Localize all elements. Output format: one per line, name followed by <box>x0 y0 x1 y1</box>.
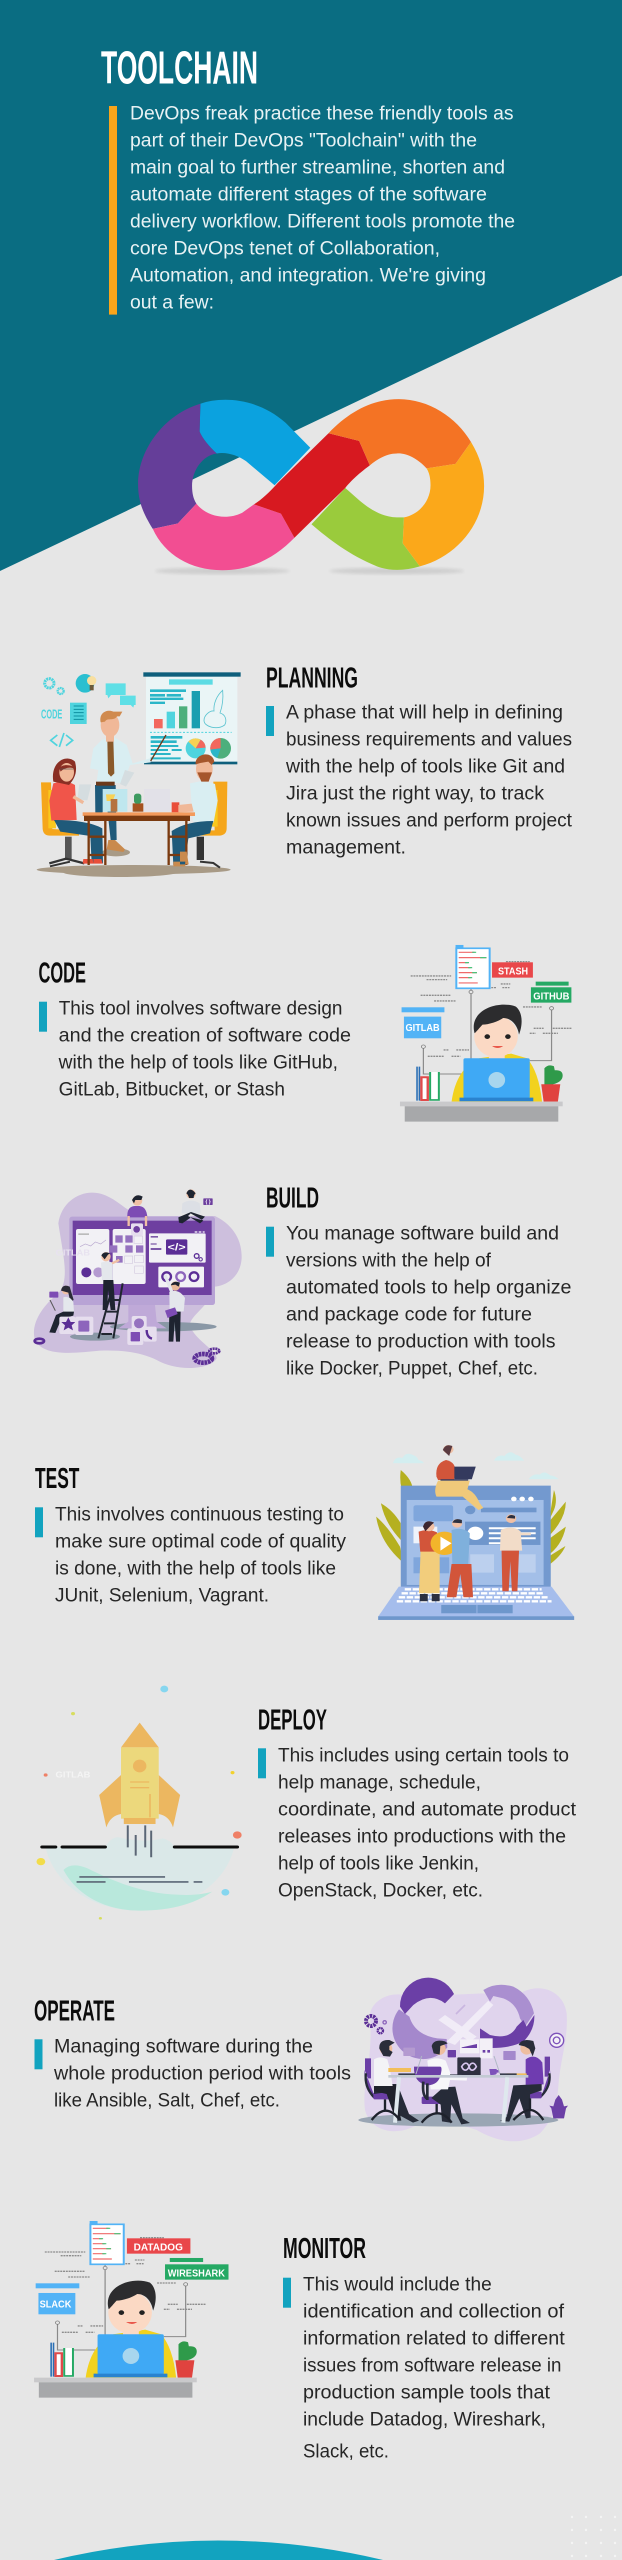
panel: hero background <box>0 0 622 571</box>
intro text: delivery workflow. Different tools promote the <box>130 212 515 233</box>
text: build <box>286 1223 572 1379</box>
text: operate: Managing software during the <box>54 2036 313 2057</box>
text: code <box>58 998 351 1100</box>
text: monitor: issues from software release in <box>303 2356 562 2377</box>
heading: monitor: MONITOR <box>283 2233 366 2265</box>
text: operate: like Ansible, Salt, Chef, etc. <box>54 2090 280 2111</box>
text: planning: with the help of tools like Git and <box>285 757 565 778</box>
illustration: developer at laptop with GitLab, GitHub and Stash tags: GITLAB <box>406 1023 440 1034</box>
text: deploy: help manage, schedule, <box>278 1772 481 1793</box>
panel: deploy <box>37 1686 577 1920</box>
panel: monitor <box>34 2221 565 2463</box>
illustration: team meeting at whiteboard: CODE <box>41 707 62 722</box>
text: planning <box>285 703 573 859</box>
panel: operate <box>34 1978 568 2141</box>
accent bar: code <box>39 1002 47 1032</box>
text: test: This involves continuous testing to <box>55 1504 344 1525</box>
text: deploy <box>278 1745 577 1901</box>
panel: code <box>38 945 572 1122</box>
panel: build <box>34 1182 571 1379</box>
text: deploy: help of tools like Jenkin, <box>278 1853 479 1874</box>
accent bar: monitor <box>283 2278 291 2308</box>
illustration: developer at laptop with GitLab, GitHub and Stash tags <box>400 945 572 1122</box>
text: code: This tool involves software design <box>59 998 342 1019</box>
footer arc <box>54 2540 383 2560</box>
heading: code: CODE <box>38 957 86 989</box>
panel: test <box>35 1445 574 1620</box>
illustration: developer at laptop with GitLab, GitHub and Stash tags: GITHUB <box>533 991 569 1002</box>
illustration: team testing on a laptop screen <box>376 1445 574 1620</box>
text: code: and the creation of software code <box>59 1026 351 1047</box>
illustration: developer at laptop with GitLab, GitHub and Stash tags: STASH <box>498 966 528 977</box>
text: build: release to production with tools <box>286 1331 556 1352</box>
heading: planning: PLANNING <box>266 662 358 694</box>
text: monitor: identification and collection of <box>303 2302 565 2323</box>
text: deploy: This includes using certain tools to <box>278 1745 569 1766</box>
intro text: main goal to further streamline, shorten and <box>130 157 505 178</box>
text: deploy: coordinate, and automate product <box>278 1799 577 1820</box>
text: deploy: releases into productions with the <box>278 1826 566 1847</box>
illustration: rocket launch <box>37 1686 242 1920</box>
illustration: team building on a large monitor <box>34 1189 242 1368</box>
text: deploy: OpenStack, Docker, etc. <box>278 1880 483 1901</box>
text: monitor <box>303 2275 565 2463</box>
text: test: make sure optimal code of quality <box>55 1531 346 1552</box>
title: TOOLCHAIN <box>101 41 258 93</box>
intro text: DevOps freak practice these friendly tools as <box>130 103 514 124</box>
accent bar: planning <box>266 706 274 736</box>
illustration: team meeting at whiteboard <box>37 672 241 877</box>
dot pattern <box>571 2516 616 2557</box>
intro text <box>130 103 515 314</box>
text: monitor: include Datadog, Wireshark, <box>303 2410 546 2431</box>
intro text: out a few: <box>130 292 214 314</box>
illustration: team around table under infinity symbol <box>358 1978 568 2141</box>
text: test <box>55 1504 346 1606</box>
illustration: team building on a large monitor: { } <box>205 1200 211 1206</box>
intro text: automate different stages of the software <box>130 184 487 206</box>
text: operate <box>53 2036 351 2111</box>
accent bar: operate <box>34 2039 42 2069</box>
text: monitor: Slack, etc. <box>303 2442 389 2463</box>
heading: deploy: DEPLOY <box>258 1704 327 1736</box>
text: monitor: information related to different <box>303 2329 565 2350</box>
heading: operate: OPERATE <box>34 1996 115 2028</box>
accent bar: intro <box>109 106 117 315</box>
icon: DevOps infinity loop <box>138 399 484 574</box>
text: build: versions with the help of <box>286 1250 492 1271</box>
text: planning: known issues and perform project <box>286 811 573 832</box>
illustration: developer at laptop with Slack, Datadog and Wireshark tags: DATADOG <box>134 2242 183 2253</box>
intro text: Automation, and integration. We're giving <box>130 266 486 287</box>
illustration: developer at laptop with Slack, Datadog and Wireshark tags <box>34 2221 229 2398</box>
text: build: You manage software build and <box>286 1223 559 1244</box>
heading: build: BUILD <box>266 1182 319 1214</box>
text: planning: management. <box>286 838 406 859</box>
text: planning: A phase that will help in defining <box>286 703 563 724</box>
text: planning: business requirements and values <box>286 730 572 751</box>
panel: planning <box>37 662 573 877</box>
accent bar: build <box>266 1227 274 1257</box>
text: operate: whole production period with tools <box>53 2063 351 2084</box>
illustration: team building on a large monitor: </> <box>168 1243 186 1254</box>
illustration: developer at laptop with Slack, Datadog and Wireshark tags: SLACK <box>40 2299 71 2310</box>
text: build: like Docker, Puppet, Chef, etc. <box>286 1358 538 1379</box>
text: build: automated tools to help organize <box>286 1277 572 1298</box>
text: monitor: production sample tools that <box>303 2383 551 2404</box>
accent bar: test <box>35 1507 43 1537</box>
text: build: and package code for future <box>286 1304 532 1325</box>
heading: test: TEST <box>35 1463 80 1495</box>
text: planning: Jira just the right way, to track <box>286 784 545 805</box>
intro text: part of their DevOps "Toolchain" with the <box>130 131 477 152</box>
text: code: with the help of tools like GitHub, <box>58 1053 338 1074</box>
text: code: GitLab, Bitbucket, or Stash <box>59 1079 285 1100</box>
text: test: JUnit, Selenium, Vagrant. <box>55 1585 269 1606</box>
illustration: developer at laptop with Slack, Datadog and Wireshark tags: WIRESHARK <box>168 2268 225 2279</box>
accent bar: deploy <box>258 1748 266 1778</box>
intro text: core DevOps tenet of Collaboration, <box>130 238 440 260</box>
illustration: team building on a large monitor: GITLAB <box>56 1248 90 1258</box>
text: test: is done, with the help of tools like <box>55 1558 336 1579</box>
illustration: rocket launch: GITLAB <box>56 1770 90 1779</box>
text: monitor: This would include the <box>303 2275 492 2296</box>
